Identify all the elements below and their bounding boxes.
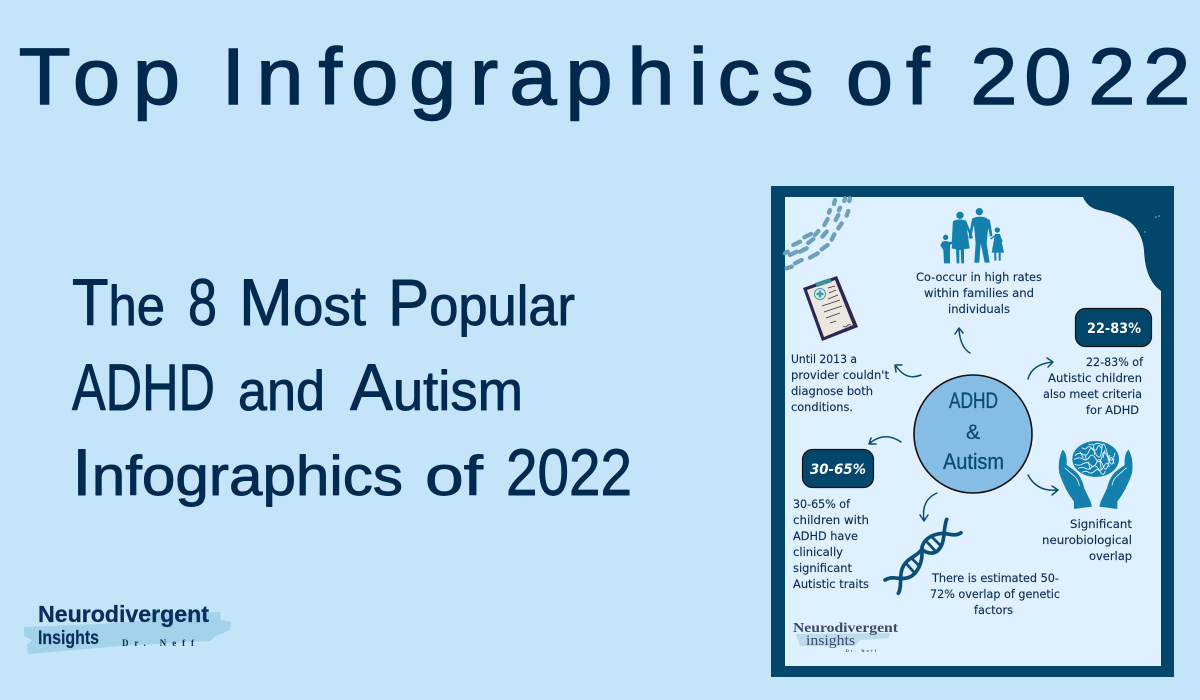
text: until 2013: provider couldn't [791, 368, 889, 382]
arrow: to 22-83% [1028, 358, 1053, 379]
text: 30-65%: significant [793, 561, 852, 575]
logo: poster Neurodivergent Insights: Neurodivergent [793, 620, 899, 635]
logo: poster Neurodivergent Insights: insights [806, 633, 855, 649]
logo: Neurodivergent Insights [24, 601, 231, 654]
callout: 30-65%: 30-65% [810, 462, 866, 478]
callout: 22-83%: 22-83% [1087, 321, 1141, 337]
subtitle: Autism [350, 350, 523, 424]
icon: brain in hands [1059, 441, 1133, 509]
text: neurobiological: overlap [1089, 549, 1132, 563]
text: neurobiological [1042, 517, 1132, 563]
text: 22-83%: 22-83% of [1086, 355, 1144, 369]
panel: infographic poster [771, 186, 1174, 677]
center circle: ADHD & Autism: ADHD [949, 388, 998, 413]
decorative dashes [785, 198, 850, 268]
text: co-occur [916, 270, 1042, 316]
logo: poster Neurodivergent Insights [793, 620, 899, 653]
text: co-occur: individuals [948, 302, 1010, 316]
center circle: ADHD & Autism: & [966, 421, 980, 444]
logo: poster Neurodivergent Insights: Dr. Neff [846, 648, 877, 653]
text: genetic factors: factors [974, 603, 1013, 617]
title: 2022 [970, 32, 1190, 121]
arrow: to DNA [920, 493, 937, 521]
subtitle: of [425, 444, 484, 507]
subtitle: 2022 [506, 435, 632, 509]
text: genetic factors [930, 571, 1060, 617]
text: 30-65%: clinically [793, 545, 843, 559]
arrow: to clipboard [895, 365, 921, 377]
center circle: ADHD & Autism [914, 375, 1032, 493]
subtitle: and [238, 359, 325, 422]
text: 30-65%: children with [793, 513, 869, 527]
arrow: to 30-65% [869, 437, 901, 444]
text: until 2013 [791, 352, 889, 414]
title: Top [19, 32, 180, 121]
arrow: to family [955, 328, 970, 353]
text: 30-65% [793, 497, 869, 591]
subtitle: Popular [388, 265, 575, 339]
logo: Neurodivergent Insights: Dr. Neff [122, 638, 195, 648]
callout: 22-83% [1076, 308, 1152, 346]
icon: DNA helix [885, 519, 961, 593]
text: 22-83%: Autistic children [1048, 371, 1142, 385]
text: until 2013: conditions. [791, 400, 853, 414]
text: until 2013: Until 2013 a [791, 352, 857, 366]
subtitle: The [72, 265, 165, 339]
text: co-occur: Co-occur in high rates [916, 270, 1042, 284]
text: 22-83%: for ADHD [1086, 403, 1139, 417]
subtitle: Infographics [72, 435, 403, 509]
text: genetic factors: There is estimated 50- [931, 571, 1059, 585]
text: genetic factors: 72% overlap of genetic [930, 587, 1060, 601]
text: 22-83% [1043, 355, 1144, 417]
subtitle: Most [239, 265, 366, 339]
center circle: ADHD & Autism: Autism [943, 449, 1004, 474]
text: co-occur: within families and [924, 286, 1034, 300]
title: Infographics [222, 32, 814, 121]
callout: 30-65% [802, 450, 874, 488]
subtitle: ADHD [72, 350, 215, 424]
text: neurobiological: Significant [1070, 517, 1132, 531]
logo: Neurodivergent Insights: Neurodivergent [38, 601, 209, 627]
text: 30-65%: 30-65% of [793, 497, 851, 511]
subtitle: 8 [188, 265, 217, 339]
text: until 2013: diagnose both [791, 384, 873, 398]
text: 22-83%: also meet criteria [1043, 387, 1142, 401]
title: of [846, 32, 931, 121]
arrow: to brain [1028, 475, 1058, 495]
decorative corner blob [1083, 197, 1161, 291]
text: neurobiological: neurobiological [1042, 533, 1132, 547]
text: 30-65%: Autistic traits [793, 577, 869, 591]
icon: clipboard [803, 276, 858, 341]
subtitle [72, 265, 632, 509]
logo: Neurodivergent Insights: Insights [38, 628, 99, 649]
text: 30-65%: ADHD have [793, 529, 858, 543]
icon: family silhouette [940, 208, 1004, 263]
